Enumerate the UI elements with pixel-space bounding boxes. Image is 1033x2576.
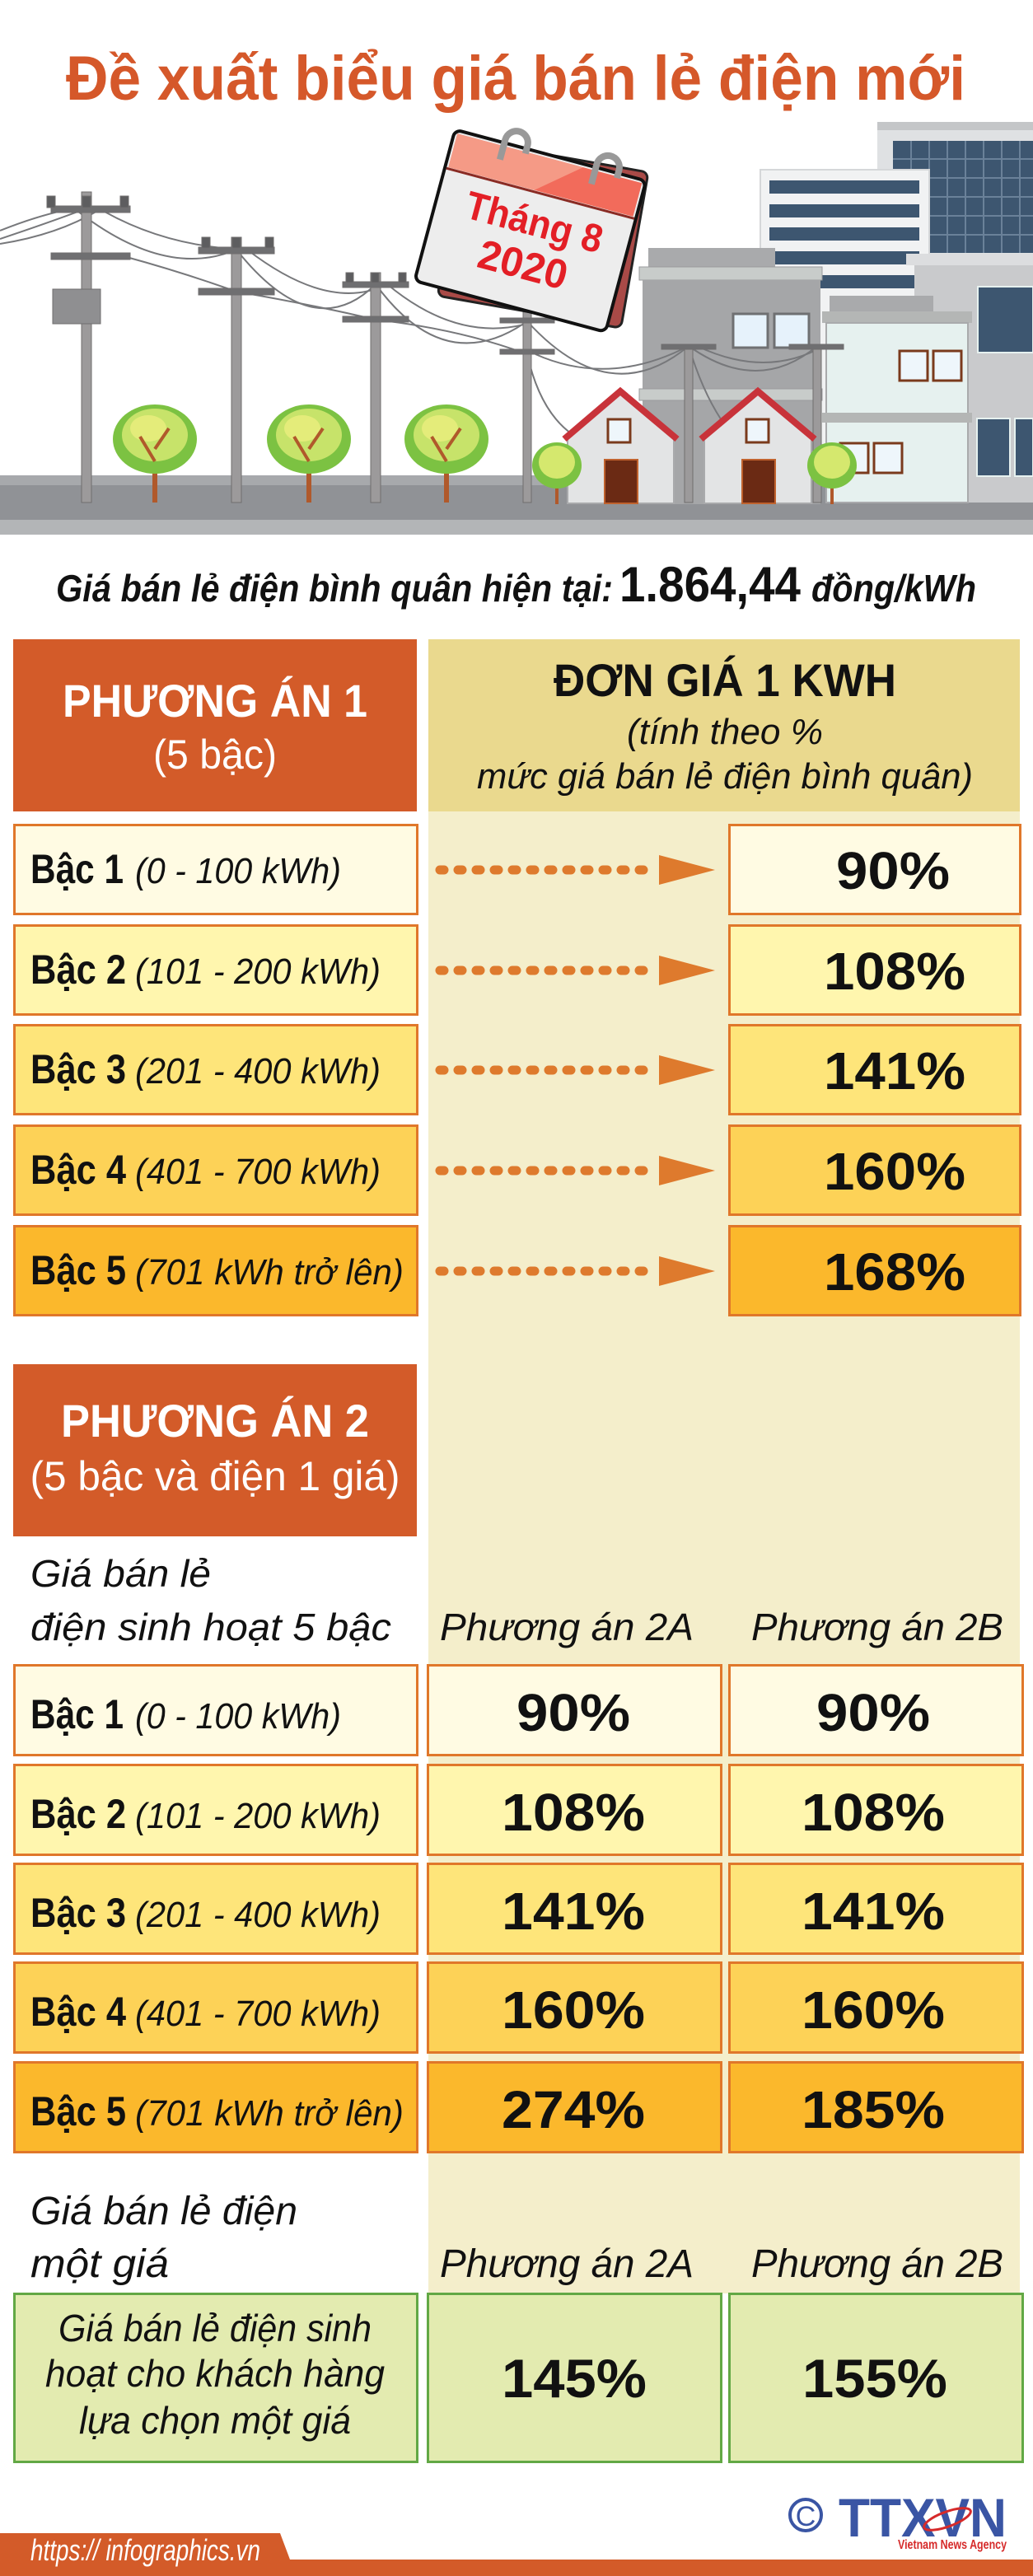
row: bac 1: (0 - 100 kWh) <box>135 851 341 891</box>
row: bac 1 <box>15 825 1020 914</box>
row: bac 3 <box>15 1863 1023 1954</box>
column headings: 5-tier <box>30 1552 1003 1648</box>
panel: phuong an 1 header: (5 bậc) <box>153 732 277 778</box>
table: phuong an 1 rows <box>15 825 1020 1315</box>
row: bac 2: (101 - 200 kWh) <box>135 1796 381 1836</box>
title: Đề xuất biểu giá bán lẻ điện mới <box>66 44 965 114</box>
row: bac 1 <box>15 1666 1023 1755</box>
table: single price row: hoạt cho khách hàng <box>45 2352 385 2395</box>
row: bac 2 <box>15 926 1020 1015</box>
panel: unit price header: ĐƠN GIÁ 1 KWH <box>554 654 896 706</box>
ground <box>0 475 1033 535</box>
row: bac 4 <box>15 1962 1023 2053</box>
row: bac 1: Bậc 1 <box>30 1691 124 1737</box>
row: bac 4: (401 - 700 kWh) <box>135 1994 381 2034</box>
subtitle: average price: Giá bán lẻ điện bình quân hiện tại: <box>56 567 613 610</box>
column headings: 5-tier: Phương án 2A <box>440 1606 694 1648</box>
row: bac 3: Bậc 3 <box>30 1046 126 1092</box>
panel: unit price header: (tính theo % <box>627 712 823 752</box>
column headings: 5-tier: Phương án 2B <box>751 1606 1003 1648</box>
footer <box>0 2533 1033 2576</box>
column headings: single price: một giá <box>30 2242 169 2286</box>
panel: phuong an 2 header: (5 bậc và điện 1 giá) <box>30 1453 400 1499</box>
illustration: street scene <box>0 115 1033 535</box>
table: single price row: 155% <box>802 2348 947 2409</box>
row: bac 5: Bậc 5 <box>30 1247 126 1293</box>
row: bac 3: (201 - 400 kWh) <box>135 1895 381 1935</box>
column headings: single price: Phương án 2A <box>440 2242 694 2286</box>
poles <box>47 192 844 503</box>
icon: calendar: 2020 <box>473 231 573 299</box>
panel: phuong an 1 header <box>13 639 417 811</box>
row: bac 5: (701 kWh trở lên) <box>135 2093 404 2134</box>
table: single price row: lựa chọn một giá <box>79 2399 351 2442</box>
row: bac 3: 141% <box>802 1882 945 1941</box>
row: bac 3: (201 - 400 kWh) <box>135 1051 381 1092</box>
column headings: single price: Phương án 2B <box>751 2242 1003 2286</box>
column headings: 5-tier: Giá bán lẻ <box>30 1552 211 1595</box>
row: bac 2: 108% <box>502 1783 645 1842</box>
panel: phuong an 1 header: PHƯƠNG ÁN 1 <box>63 675 367 727</box>
row: bac 1: (0 - 100 kWh) <box>135 1696 341 1737</box>
row: bac 4: Bậc 4 <box>30 1989 126 2035</box>
trees <box>113 404 857 504</box>
row: bac 2: Bậc 2 <box>30 1791 126 1837</box>
row: bac 5: (701 kWh trở lên) <box>135 1252 404 1293</box>
icon: calendar: Tháng 8 <box>460 184 607 262</box>
table: single price row <box>15 2293 1023 2461</box>
background column band <box>428 639 1020 2293</box>
row: bac 5: 168% <box>824 1242 965 1302</box>
column headings: single price <box>30 2190 1003 2286</box>
table: single price row: Giá bán lẻ điện sinh <box>58 2307 372 2349</box>
column headings: single price: Giá bán lẻ điện <box>30 2190 297 2233</box>
row: bac 3: Bậc 3 <box>30 1890 126 1936</box>
footer: https:// infographics.vn <box>30 2533 260 2567</box>
logo: TTXVN: TTXVN <box>839 2487 1007 2548</box>
row: bac 1: Bậc 1 <box>30 846 124 892</box>
power lines <box>0 208 824 445</box>
row: bac 1: 90% <box>516 1683 630 1742</box>
subtitle: average price <box>56 557 976 612</box>
houses <box>564 391 815 503</box>
row: bac 5 <box>15 2063 1023 2152</box>
row: bac 2: 108% <box>824 942 965 1001</box>
row: bac 1: 90% <box>836 841 950 900</box>
row: bac 3: 141% <box>502 1882 645 1941</box>
panel: unit price header: mức giá bán lẻ điện bình quân) <box>477 756 973 797</box>
table: phuong an 2 rows <box>15 1666 1023 2152</box>
logo: TTXVN <box>790 2487 1007 2552</box>
panel: phuong an 2 header <box>13 1364 417 1536</box>
logo: TTXVN: C <box>796 2501 816 2532</box>
row: bac 4: 160% <box>802 1980 945 2040</box>
row: bac 4: Bậc 4 <box>30 1147 126 1193</box>
subtitle: average price: đồng/kWh <box>811 567 976 610</box>
row: bac 2: Bậc 2 <box>30 947 126 993</box>
column headings: 5-tier: điện sinh hoạt 5 bậc <box>30 1606 391 1648</box>
row: bac 2: 108% <box>802 1783 945 1842</box>
row: bac 3 <box>15 1025 1020 1114</box>
row: bac 4: 160% <box>824 1142 965 1201</box>
row: bac 2: (101 - 200 kWh) <box>135 951 381 992</box>
row: bac 4: 160% <box>502 1980 645 2040</box>
table: single price row: 145% <box>502 2348 647 2409</box>
row: bac 4: (401 - 700 kWh) <box>135 1152 381 1192</box>
row: bac 4 <box>15 1125 1020 1214</box>
row: bac 2 <box>15 1765 1023 1855</box>
subtitle: average price: 1.864,44 <box>619 557 802 612</box>
row: bac 5: 274% <box>502 2080 645 2139</box>
row: bac 5 <box>15 1226 1020 1315</box>
buildings <box>639 122 1033 504</box>
row: bac 5: Bậc 5 <box>30 2088 126 2134</box>
row: bac 1: 90% <box>816 1683 930 1742</box>
icon: calendar <box>413 115 663 344</box>
panel: unit price header <box>428 639 1020 811</box>
panel: phuong an 2 header: PHƯƠNG ÁN 2 <box>61 1395 369 1447</box>
row: bac 3: 141% <box>824 1041 965 1101</box>
row: bac 5: 185% <box>802 2080 945 2139</box>
